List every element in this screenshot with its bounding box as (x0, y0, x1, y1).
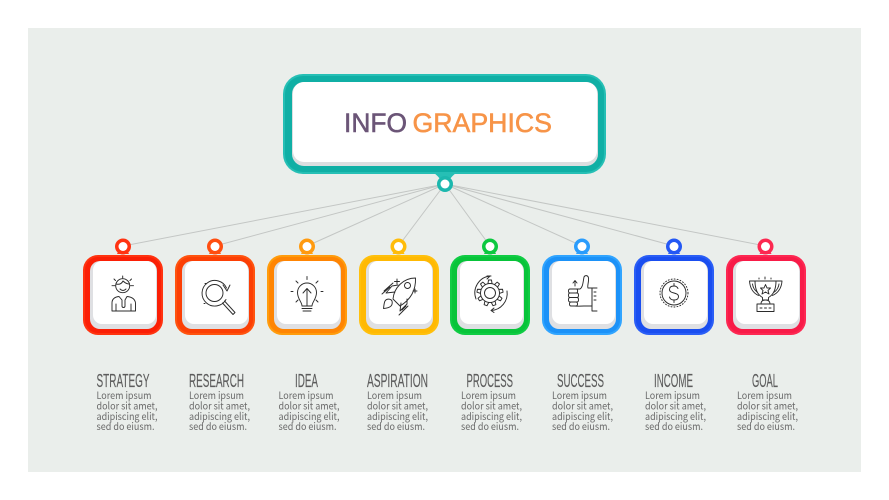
label: success: dolor sit amet, (552, 398, 613, 412)
label: income: dolor sit amet, (645, 398, 706, 412)
label: research: dolor sit amet, (189, 398, 250, 412)
label: goal: GOAL (752, 371, 778, 391)
title panel (283, 74, 606, 174)
label: success: SUCCESS (557, 371, 604, 391)
label: strategy: Lorem ipsum (96, 387, 152, 402)
label: income: sed do eiusm. (645, 418, 703, 433)
label: process: PROCESS (466, 371, 513, 391)
label: idea: adipiscing elit, (278, 408, 340, 423)
label: idea (278, 371, 340, 433)
label: process: sed do eiusm. (461, 418, 519, 433)
label: strategy (96, 371, 158, 433)
label: goal: dolor sit amet, (737, 398, 798, 412)
label: aspiration: ASPIRATION (367, 371, 428, 391)
label: idea: IDEA (295, 371, 318, 391)
icon: trophy (750, 277, 782, 312)
label: success (552, 371, 613, 433)
label: strategy: adipiscing elit, (96, 408, 158, 423)
label: income: INCOME (654, 371, 693, 391)
card 5: process (450, 238, 530, 335)
label: goal: Lorem ipsum (737, 387, 792, 402)
card 8: goal (726, 238, 806, 335)
label: success: Lorem ipsum (552, 387, 607, 402)
label: strategy: dolor sit amet, (96, 398, 158, 412)
title text: GRAPHICS (412, 108, 552, 138)
icon: gear (475, 276, 507, 312)
label: goal: sed do eiusm. (737, 418, 795, 433)
label: research (189, 371, 250, 433)
label: goal (737, 371, 798, 433)
label: strategy: STRATEGY (96, 371, 150, 391)
card 4: aspiration (359, 238, 439, 335)
label: success: adipiscing elit, (552, 408, 613, 423)
card 1: strategy (83, 238, 163, 335)
card 3: idea (267, 238, 347, 335)
label: aspiration: sed do eiusm. (367, 418, 425, 433)
label: aspiration: Lorem ipsum (367, 387, 422, 402)
label: process (461, 371, 522, 433)
title text (344, 108, 552, 138)
card 7: income (634, 238, 714, 335)
label: income (645, 371, 706, 433)
label: idea: dolor sit amet, (278, 398, 340, 412)
label: income: adipiscing elit, (645, 408, 706, 423)
card 2: research (175, 238, 255, 335)
icon: dollar coin (660, 279, 688, 307)
label: income: Lorem ipsum (645, 387, 700, 402)
label: research: sed do eiusm. (189, 418, 247, 433)
label: research: Lorem ipsum (189, 387, 244, 402)
title connector node (434, 173, 456, 192)
label: process: Lorem ipsum (461, 387, 516, 402)
label: goal: adipiscing elit, (737, 408, 798, 423)
label: idea: sed do eiusm. (278, 418, 337, 433)
icon: light bulb (291, 276, 323, 311)
label: success: sed do eiusm. (552, 418, 610, 433)
card 6: success (542, 238, 622, 335)
icon: magnifier (202, 280, 235, 314)
title text: INFO (344, 108, 407, 138)
label: process: dolor sit amet, (461, 398, 522, 412)
label: aspiration: dolor sit amet, (367, 398, 428, 412)
connector lines (123, 184, 766, 246)
label: strategy: sed do eiusm. (96, 418, 155, 433)
icon: thumbs up (568, 276, 597, 311)
icon: person (112, 276, 136, 311)
label: research: RESEARCH (189, 371, 244, 391)
label: process: adipiscing elit, (461, 408, 522, 423)
label: idea: Lorem ipsum (278, 387, 334, 402)
label: aspiration (367, 371, 428, 433)
label: research: adipiscing elit, (189, 408, 250, 423)
icon: rocket (382, 278, 417, 315)
label: aspiration: adipiscing elit, (367, 408, 428, 423)
